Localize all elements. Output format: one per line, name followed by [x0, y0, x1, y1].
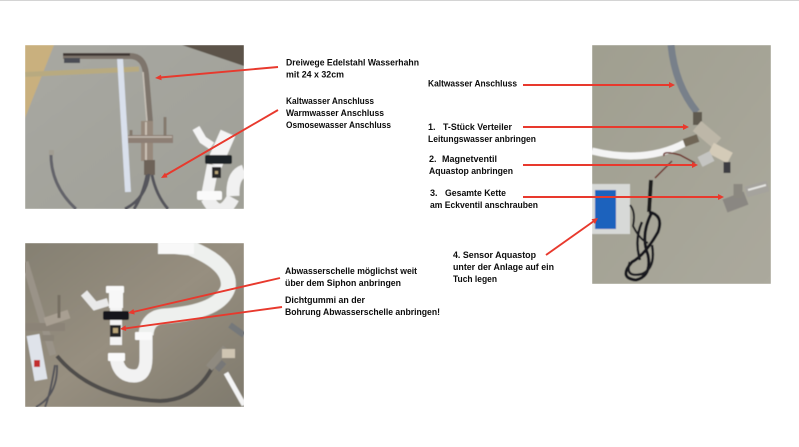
label: connections: Kaltwasser Anschluss	[286, 96, 374, 106]
label: step 3: am Eckventil anschrauben	[430, 200, 538, 210]
label: step 4: unter der Anlage auf ein	[453, 262, 554, 272]
label: sealing rubber: Bohrung Abwasserschelle anbringen!	[285, 307, 440, 317]
arrows	[120, 67, 724, 331]
arrow: sensor	[546, 218, 598, 255]
label: sealing rubber: Dichtgummi an der	[285, 295, 365, 305]
label: step 1: Leitungswasser anbringen	[428, 134, 536, 144]
label: wastewater clamp: Abwasserschelle möglichst weit	[285, 266, 417, 276]
label: faucet: Dreiwege Edelstahl Wasserhahn	[286, 58, 419, 68]
arrow: faucet	[155, 67, 278, 80]
arrow: magnetic valve	[523, 162, 698, 168]
label: step 3: 3.	[430, 188, 438, 198]
label: step 2: Magnetventil	[442, 154, 497, 164]
label: step 1: T-Stück Verteiler	[443, 122, 512, 132]
arrow: T-piece	[523, 124, 689, 130]
label: wastewater clamp: über dem Siphon anbringen	[285, 278, 401, 288]
label: step 1: 1.	[428, 122, 436, 132]
photo: siphon with wastewater clamp	[25, 243, 244, 407]
label: connections: Osmosewasser Anschluss	[286, 120, 391, 130]
arrow: connections	[161, 110, 278, 178]
label: step 2: 2.	[429, 154, 437, 164]
label: faucet: mit 24 x 32cm	[286, 70, 344, 80]
label: step 3: Gesamte Kette	[445, 188, 506, 198]
arrow: wastewater clamp	[128, 278, 280, 314]
label: cold water connection: Kaltwasser Anschluss	[428, 78, 517, 88]
arrow: cold water connection	[523, 82, 675, 88]
label: step 2: Aquastop anbringen	[429, 166, 513, 176]
label: step 4: 4. Sensor Aquastop	[453, 250, 536, 260]
label: step 4: Tuch legen	[453, 274, 497, 284]
photo: T-piece, magnetic valve and sensor	[592, 45, 771, 284]
label: connections: Warmwasser Anschluss	[286, 108, 384, 118]
photo: faucet with ruler	[25, 45, 244, 210]
arrow: corner valve	[523, 194, 724, 200]
arrow: sealing rubber	[120, 307, 282, 331]
